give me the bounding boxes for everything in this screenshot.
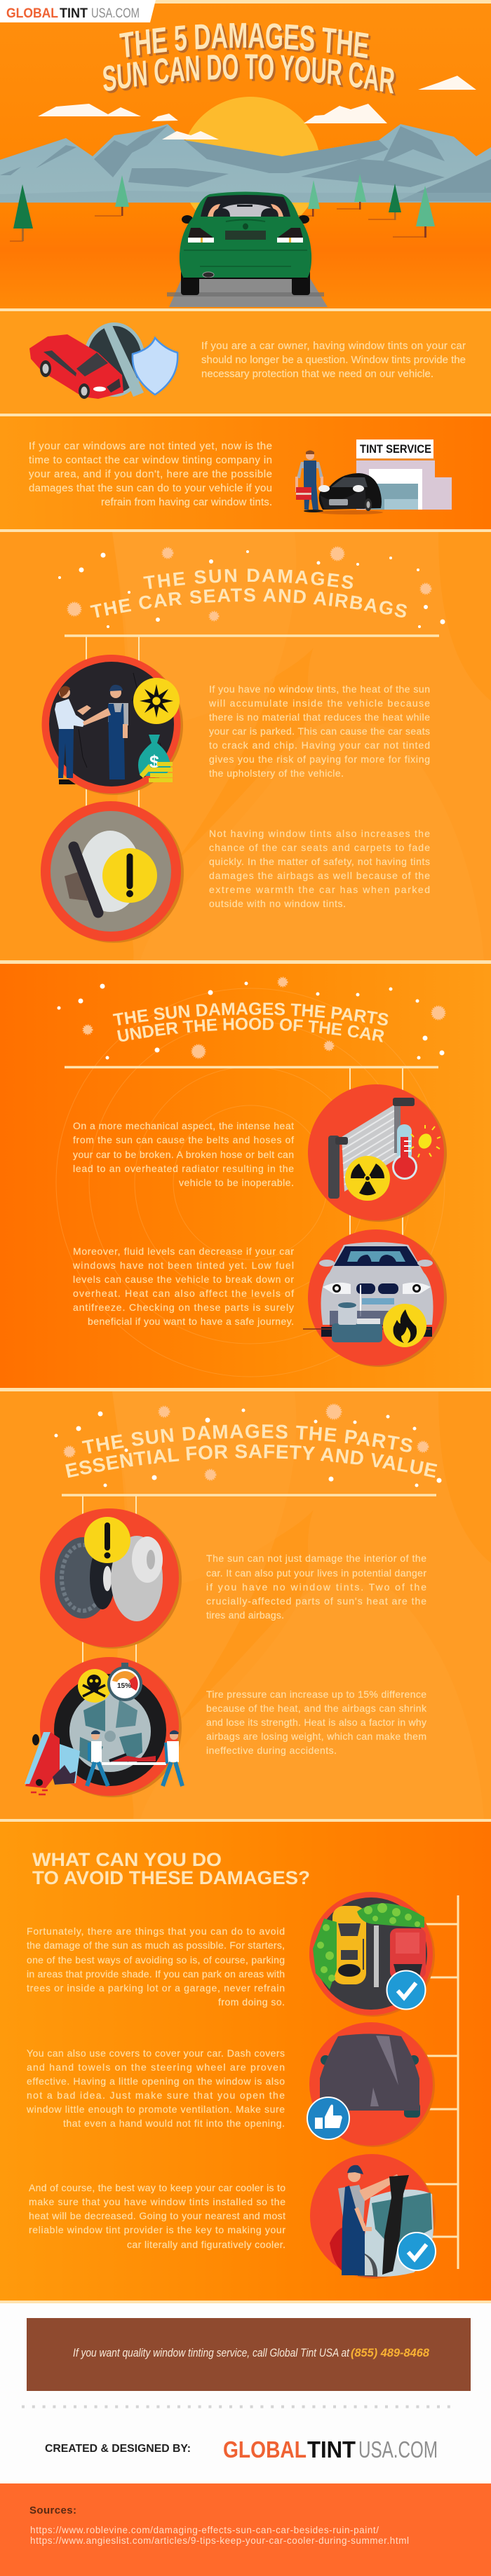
text block: your area, and if you don't, here are the possible (29, 468, 272, 480)
mechanic figure (338, 2165, 400, 2275)
divider stripe (0, 2301, 491, 2303)
paramedics and stretcher (87, 1730, 182, 1786)
text block: If you are a car owner, having window tints on your car (201, 340, 466, 352)
text block: to crack and chip. Having your car not tinted (209, 740, 430, 751)
text block: because of the heat, and the airbags can shrink (206, 1703, 427, 1714)
text block: car literally and figuratively cooler. (127, 2239, 285, 2250)
gauge: 15% (117, 1682, 131, 1690)
text block: vehicle to be inoperable. (179, 1177, 294, 1188)
tint film (382, 2175, 409, 2275)
heading: UNDER THE HOOD OF THE CAR (117, 1018, 384, 1042)
call to action box (27, 2318, 471, 2391)
text block: and lose its strength. Heat is also a factor in why (206, 1717, 426, 1728)
text block: damages the airbags as well because of the (209, 870, 430, 881)
gauge (107, 1663, 142, 1701)
icon: red car (29, 334, 123, 399)
text block: levels can cause the vehicle to break down or (73, 1274, 294, 1285)
mountains (0, 124, 491, 203)
text block: the upholstery of the vehicle. (209, 768, 344, 779)
icon: window disc with stripes (83, 322, 145, 397)
heading: WHAT CAN YOU DO (32, 1849, 222, 1870)
credit label: CREATED & DESIGNED BY: (45, 2443, 191, 2455)
text block: there is no material that reduces the heat while (209, 711, 430, 723)
trees (10, 174, 435, 241)
text block: And of course, the best way to keep your car cooler is to (29, 2182, 285, 2193)
icon: black car (318, 473, 383, 514)
text block: if you have no window tints. Two of the (206, 1581, 426, 1593)
text block: car. It can also put your lives in potential danger (206, 1567, 426, 1579)
text block: should no longer be a question. Window tints provide the (201, 354, 466, 366)
text block: lead to an overheated radiator resulting in the (73, 1163, 294, 1174)
text block (201, 340, 466, 380)
heading: TO AVOID THESE DAMAGES? (32, 1867, 310, 1888)
title (103, 22, 396, 95)
connector lines (65, 636, 439, 810)
text block (27, 1926, 285, 2008)
text block: from the sun can cause the belts and hoses of (73, 1134, 294, 1145)
money bag: $ (149, 752, 159, 772)
text block: from doing so. (218, 1996, 285, 2008)
panel: intro window tint protection (0, 311, 491, 414)
thermometer (392, 1124, 417, 1180)
text block: tires and airbags. (206, 1609, 284, 1621)
heading: THE SUN DAMAGES THE PARTS (81, 1424, 412, 1454)
divider stripe (0, 529, 491, 532)
text block: If you have no window tints, the heat of the sun (209, 683, 430, 695)
text block: You can also use covers to cover your car. Dash covers (27, 2047, 285, 2059)
sources links (30, 2525, 409, 2546)
text block: the damage of the sun as much as possible. For starters, (27, 1940, 285, 1951)
overturned ambulance (25, 1732, 80, 1794)
heading (90, 568, 407, 618)
small sun (410, 1125, 440, 1157)
text block (209, 828, 430, 909)
red car (390, 1928, 426, 1979)
text block (73, 1120, 294, 1188)
text block: Not having window tints also increases the (209, 828, 430, 839)
icon: handshake with sun and money (42, 655, 183, 795)
yellow car (332, 1906, 366, 1984)
decoration: sun dots (58, 978, 445, 1060)
text block: If your car windows are not tinted yet, now is the (29, 440, 272, 452)
clouds (38, 76, 476, 139)
divider stripe (0, 1388, 491, 1391)
text block (208, 683, 430, 779)
text block: your car is parked. This can cause the car seats (209, 725, 430, 737)
footer logo: GLOBAL (223, 2437, 307, 2462)
divider stripe (0, 308, 491, 311)
footer logo: TINT (307, 2437, 356, 2462)
panel: safety and value (0, 1391, 491, 1819)
money bag (138, 735, 173, 782)
icon: mechanic installing tint (310, 2154, 436, 2279)
text block: extreme warmth the car has when parked (209, 884, 430, 895)
sources links: https://www.roblevine.com/damaging-effects-sun-can-car-besides-ruin-paint/ (30, 2525, 379, 2535)
text block: one of the best ways of avoiding so is, of course, parking (27, 1954, 285, 1965)
panel: what can you do (0, 1822, 491, 2301)
divider stripe (0, 1819, 491, 1822)
text block: ineffective during accidents. (206, 1745, 337, 1756)
heading: ESSENTIAL FOR SAFETY AND VALUE (65, 1444, 438, 1478)
footer logo: USA.COM (358, 2437, 438, 2462)
icon: radiator (308, 1084, 447, 1222)
decoration: sun dots (58, 547, 445, 628)
text block (26, 2047, 285, 2129)
text block: quickly. In the matter of safety, not having tints (209, 856, 430, 867)
logo tab: GLOBAL (6, 6, 58, 21)
header panel: road scene with title (0, 0, 491, 308)
icon: shield (133, 338, 177, 395)
footer logo (223, 2437, 438, 2462)
text block: will accumulate inside the vehicle because (208, 697, 430, 709)
text block: that even a hand would not fit into the opening. (63, 2118, 285, 2129)
icon: tire pressure accident (25, 1657, 182, 1797)
text block: your car to be broken. A broken hose or belt can (73, 1149, 294, 1160)
check badge (387, 1971, 425, 2009)
text block: overheat. Heat can also affect the levels of (73, 1288, 294, 1299)
text block: effective. Having a little opening on the window is also (27, 2076, 285, 2087)
title: THE 5 DAMAGES THE (121, 25, 370, 60)
text block (72, 1246, 294, 1327)
text block (29, 440, 272, 508)
text block: reliable window tint provider is the key to making your (29, 2224, 285, 2235)
skull badge (78, 1669, 112, 1703)
panel: sources (0, 2483, 491, 2576)
divider stripe (0, 414, 491, 416)
call to action box: If you want quality window tinting service, call Global Tint USA at (73, 2346, 350, 2359)
panel: call to action and credits (0, 2303, 491, 2483)
icon: airbag warning (41, 801, 184, 943)
text block: time to contact the car window tinting company in (29, 454, 272, 466)
title: THE 5 DAMAGES THE (119, 22, 369, 59)
text block: gives you the risk of paying for more for fixing (209, 754, 430, 765)
icon: car cover (307, 2022, 435, 2147)
panel: car seats and airbags (0, 532, 491, 960)
connector lines (65, 1067, 438, 1237)
text block: airbags are losing weight, which can make them (206, 1731, 426, 1742)
tree leaves (313, 1903, 424, 1989)
connector lines (424, 1895, 458, 2269)
text block: antifreeze. Checking on these parts is surely (73, 1302, 294, 1313)
text block: refrain from having car window tints. (101, 496, 272, 508)
text block: beneficial if you want to have a safe journey. (88, 1316, 294, 1327)
text block (29, 2182, 285, 2250)
tree leaves highlights (317, 1903, 420, 1982)
text block: crucially-affected parts of sun's heat are the (206, 1595, 426, 1607)
call to action box: (855) 489-8468 (351, 2346, 430, 2359)
icon: tint service shop (356, 439, 452, 510)
text block: Fortunately, there are things that you can do to avoid (27, 1926, 285, 1937)
heading (32, 1849, 310, 1888)
battery (332, 1302, 382, 1342)
text block: Tire pressure can increase up to 15% difference (206, 1689, 426, 1700)
sun badge (133, 678, 180, 724)
road (167, 278, 328, 307)
text block: Moreover, fluid levels can decrease if your car (73, 1246, 294, 1257)
radiation badge (345, 1156, 390, 1201)
sun (180, 97, 321, 237)
logo tab: TINT (60, 6, 88, 21)
text block (206, 1553, 426, 1621)
text block: heat will be decreased. Going to your nearest and most (29, 2210, 285, 2221)
text block: necessary protection that we need on our vehicle. (201, 368, 433, 380)
title: SUN CAN DO TO YOUR CAR (103, 54, 394, 94)
heading: THE SUN DAMAGES THE PARTS (112, 1002, 389, 1025)
text block (206, 1689, 427, 1756)
icon: parking in shade (309, 1892, 435, 2017)
green car (180, 192, 311, 295)
check badge (398, 2233, 436, 2270)
text block: window little enough to promote ventilation. Make sure (26, 2104, 285, 2115)
text block: windows have not been tinted yet. Low fuel (72, 1260, 294, 1271)
panel: parts under the hood (0, 964, 491, 1388)
icon: mechanic (295, 450, 323, 512)
text block: not a bad idea. Just make sure that you open the (27, 2090, 285, 2101)
icon: tint service shop: TINT SERVICE (360, 442, 431, 456)
text block: and hand towels on the steering wheel are proven (27, 2062, 285, 2073)
logo tab (0, 0, 156, 22)
heading: THE CAR SEATS AND AIRBAGS (90, 588, 407, 618)
text block: make sure that you have window tints installed so the (29, 2196, 285, 2207)
logo tab: USA.COM (91, 6, 140, 21)
title: SUN CAN DO TO YOUR CAR (107, 56, 396, 95)
left man (55, 686, 91, 784)
text block: trees or inside a parking lot or a garage, never refrain (27, 1982, 285, 1994)
text block: On a more mechanical aspect, the intense heat (73, 1120, 294, 1131)
text block: in areas that provide shade. If you can park on areas with (27, 1968, 285, 1979)
right man (83, 685, 128, 779)
fire badge (383, 1304, 426, 1347)
heading (112, 1002, 389, 1042)
heading: THE SUN DAMAGES (143, 568, 354, 589)
text block: The sun can not just damage the interior of the (206, 1553, 426, 1564)
thumbs up badge (307, 2097, 349, 2139)
icon: car fuel and fire (303, 1229, 447, 1367)
panel: contact tint company (0, 416, 491, 529)
text block: damages that the sun can do to your vehicle if you (29, 482, 272, 494)
divider stripe (0, 960, 491, 964)
sources links: https://www.angieslist.com/articles/9-tips-keep-your-car-cooler-during-summer.html (30, 2535, 409, 2546)
decoration: sun dots (55, 1405, 442, 1487)
icon: tire and airbag warning (40, 1508, 182, 1649)
text block: outside with no window tints. (209, 898, 346, 909)
text block: chance of the car seats and carpets to fade (209, 842, 430, 853)
sources heading: Sources: (29, 2505, 76, 2516)
heading (65, 1424, 438, 1478)
connector lines (62, 1495, 436, 1668)
